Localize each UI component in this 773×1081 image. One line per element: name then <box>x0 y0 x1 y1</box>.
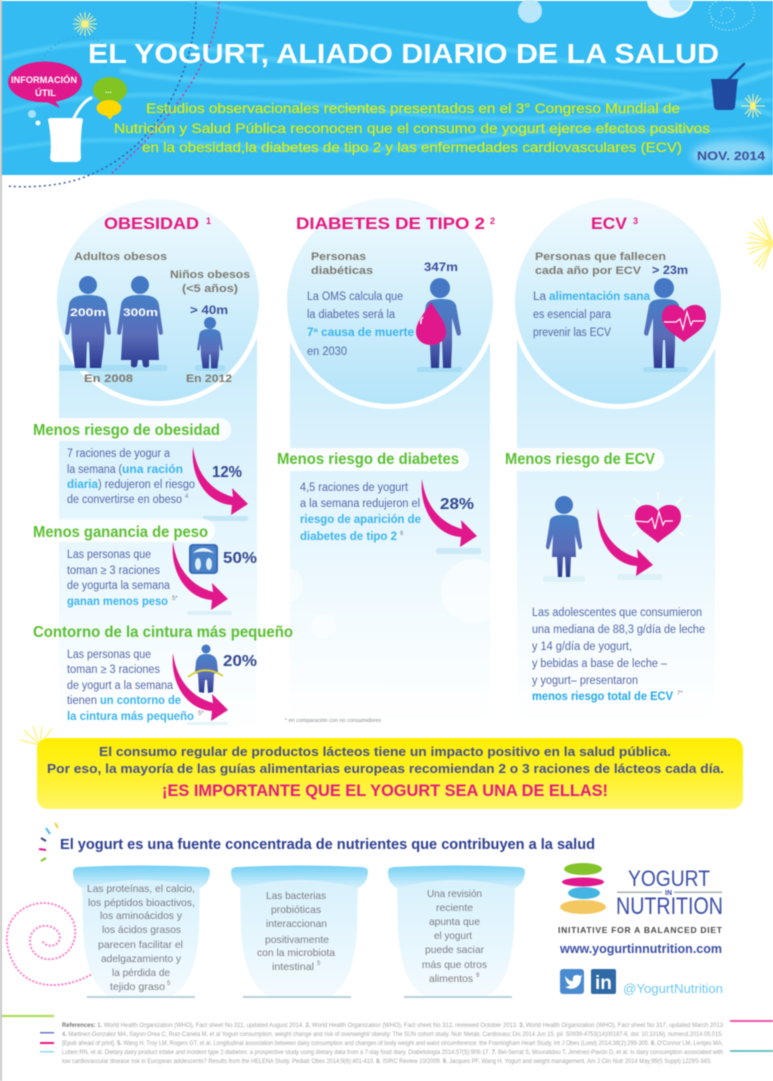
text block <box>67 549 178 608</box>
text: alimentación sana: alimentación sana <box>549 291 651 303</box>
arrow <box>598 508 653 576</box>
subtitle: Estudios observacionales recientes presentados en el 3° Congreso Mundial de <box>146 100 680 116</box>
text: el yogurt <box>434 930 472 942</box>
panel: obesidad <box>52 194 264 730</box>
subtitle <box>114 100 710 155</box>
text block: menos riesgo total de ECV <box>532 691 673 703</box>
stat: 12% <box>212 464 242 481</box>
references: Luben RN, et al. Dietary dairy product intake and incident type 2 diabetes: a prospective study using dietary data from a 7-day food diary. Diabetologia 2014;57(5):909-17. 7. Bel-Serrat S, Mouratidou T, Jiménez-Pavón D, et al. Is dairy consumption associated with <box>62 1049 723 1056</box>
heading: Menos ganancia de peso <box>33 524 208 541</box>
text: OMS: La OMS calcula que <box>307 291 403 303</box>
text block: un contorno de <box>100 695 181 707</box>
text block: 5* <box>198 711 204 717</box>
yellow banner: ¡ES IMPORTANTE QUE EL YOGURT SEA UNA DE ELLAS! <box>162 781 608 800</box>
text <box>87 883 195 993</box>
date bubble: NOV. 2014 <box>697 149 765 163</box>
text block: 5* <box>172 596 178 602</box>
heading: ecv: ECV <box>591 214 628 233</box>
label: adultos obesos: Adultos obesos <box>74 251 167 263</box>
text: 5 <box>317 961 321 967</box>
wordmark: IN <box>665 890 672 897</box>
heading: Contorno de la cintura más pequeño <box>33 624 293 641</box>
text block: diaria <box>67 479 99 491</box>
section: menos riesgo de ecv <box>498 448 705 703</box>
text: OMS: en 2030 <box>307 346 347 358</box>
text: OMS: 7ª causa de muerte <box>307 327 414 339</box>
references <box>62 1022 723 1065</box>
label: 40m: > 40m <box>190 303 228 317</box>
text: más que otros <box>422 959 487 971</box>
text: 9 <box>476 973 480 979</box>
shadows <box>543 574 662 582</box>
callout: información útil <box>8 62 82 108</box>
text: apunta que <box>429 916 480 928</box>
icon: person with heart <box>643 278 706 372</box>
icon: linkedin <box>591 969 616 994</box>
icon: stacked stones <box>560 863 606 914</box>
logo: yogurt in nutrition <box>558 863 723 996</box>
decorative ticks <box>39 823 58 861</box>
text: Una revisión <box>427 888 482 900</box>
page left edge <box>0 0 2 1081</box>
icon: adolescent <box>546 496 582 577</box>
heading: diabetes: 2 <box>490 216 495 226</box>
text block <box>67 448 195 506</box>
spiral <box>7 903 105 985</box>
icon: adult 300m <box>117 276 163 368</box>
pill <box>498 448 664 471</box>
text block: 6 <box>400 531 404 537</box>
text: con la microbiota <box>257 947 335 959</box>
text: alimentación sana: prevenir las ECV <box>533 327 611 339</box>
label: personas que fallecen: Personas que fallecen <box>535 251 666 263</box>
text: parecen facilitar el <box>98 939 183 951</box>
text block: tienen <box>67 695 97 707</box>
heading: Menos riesgo de obesidad <box>33 422 220 439</box>
text block: la semana ( <box>67 464 122 476</box>
star right <box>741 94 765 118</box>
shadow <box>187 611 232 615</box>
url: www.yogurtinnutrition.com <box>559 941 722 956</box>
text block: 4,5 raciones de yogurt <box>300 482 409 494</box>
label: 23m: > 23m <box>652 263 688 277</box>
text block: 4 <box>185 494 189 500</box>
icon: linkedin: in <box>595 973 612 994</box>
stat: 28% <box>440 496 474 513</box>
text block: riesgo de aparición de <box>300 514 421 526</box>
text: los ácidos grasos <box>102 924 181 936</box>
text block: una ración <box>122 464 183 476</box>
section: menos riesgo de obesidad <box>26 418 248 521</box>
arrow <box>173 542 228 610</box>
text: los péptidos bioactivos, <box>88 897 195 909</box>
yellow banner: Por eso, la mayoría de las guías alimentarias europeas recomiendan 2 o 3 raciones de lácteos cada día. <box>47 761 724 776</box>
text: OMS: la diabetes será la <box>307 309 396 321</box>
text <box>257 890 335 973</box>
dotted swirl <box>709 0 754 30</box>
text: la pérdida de <box>112 967 170 979</box>
heading: obesidad: 1 <box>206 216 211 226</box>
text <box>422 888 487 985</box>
text: reciente <box>436 902 473 914</box>
shadow <box>187 722 228 725</box>
wordmark <box>616 866 723 920</box>
pill <box>26 519 215 542</box>
label: niños obesos: Niños obesos <box>170 269 250 281</box>
label: personas que fallecen <box>535 251 666 277</box>
label: niños obesos <box>170 269 250 295</box>
heading: Menos riesgo de ECV <box>505 451 655 468</box>
icon: man with tape <box>188 644 223 693</box>
pill <box>26 418 231 441</box>
panel: ecv <box>510 193 726 720</box>
text block: la cintura más pequeño <box>67 711 194 723</box>
yellow banner <box>37 738 743 809</box>
text block: Las personas que <box>67 549 151 561</box>
decorative circles <box>267 559 505 638</box>
references: low cardiovascular disease risk in European adolescents? Results from the HELENA Study. Pediatr Obes 2014;9(6):401-410. 8. ISIRC Review 10/2009. 9. Jacques PF, Wang H. Yogurt and weight management. Am J Clin Nutr 2014 May;99(5 Suppl):1229S-34S. <box>62 1058 712 1065</box>
label: personas que fallecen: cada año por ECV <box>535 265 642 277</box>
heading: diabetes: DIABETES DE TIPO 2 <box>296 214 485 233</box>
text: alimentos <box>429 973 473 985</box>
pill <box>270 448 469 471</box>
text: alimentación sana <box>533 291 651 339</box>
handle: @YogurtNutrition <box>623 981 723 996</box>
icon: child <box>197 317 223 368</box>
icon: person with drop <box>416 278 462 372</box>
cup 2 <box>231 866 368 998</box>
icon: speech bubbles <box>93 77 127 120</box>
header banner <box>2 0 773 187</box>
text block <box>532 607 705 703</box>
text block: toman ≥ 3 raciones <box>67 664 160 676</box>
text: intestinal <box>272 961 314 973</box>
star <box>73 12 97 36</box>
text: tejido graso <box>110 981 165 993</box>
heading: Menos riesgo de diabetes <box>277 451 459 468</box>
text: OMS <box>307 291 414 358</box>
decorative star right <box>747 217 773 269</box>
label: personas diabéticas: diabéticas <box>311 265 373 277</box>
text: alimentación sana: es esencial para <box>533 309 612 321</box>
text block: 7* <box>677 691 683 697</box>
text block: y 14 g/día de yogurt, <box>532 641 632 653</box>
shadows <box>59 365 225 371</box>
text: adelgazamiento y <box>101 953 182 965</box>
text block: de yogurt a la semana <box>67 680 174 692</box>
text block: de convertirse en obeso <box>67 494 182 506</box>
wordmark: YOGURT <box>628 866 710 891</box>
text block: ganan menos peso <box>67 596 168 608</box>
text: interaccionan <box>266 918 327 930</box>
text: los aminoácidos y <box>100 910 183 922</box>
label: personas diabéticas: Personas <box>311 251 366 263</box>
label: en 2012: En 2012 <box>186 373 232 385</box>
arrow <box>193 447 248 515</box>
text block: diabetes de tipo 2 <box>300 531 397 543</box>
icon: white yogurt cup <box>28 98 91 162</box>
references: References: 1. World Health Organization (WHO), Fact sheet No 311, updated August 2014. 2. World Health Organization (WHO), Fact sheet No 312, reviewed October 2013. 3. World Health Organization (WHO), Fact sheet No 317, updated March 2013 <box>62 1022 723 1029</box>
stat: 20% <box>223 653 257 670</box>
shadow <box>203 516 248 521</box>
section heading: nutrientes: El yogurt es una fuente concentrada de nutrientes que contribuyen a la salud <box>60 836 595 853</box>
references: [Epub ahead of print]. 5. Wang H, Troy LM, Rogers GT, et al. Longitudinal association between dairy consumption and changes of body weight and waist circumference: the Framingham Heart Study. Int J Obes (Lond) 2014;38(2):299-305. 6. O'Connor LM, Lentjes MA, <box>62 1040 723 1047</box>
text block: de yogurta la semana <box>67 580 171 592</box>
yellow banner: El consumo regular de productos lácteos tiene un impacto positivo en la salud pública. <box>99 744 671 759</box>
label: 347m: 347m <box>424 260 458 274</box>
decorative star left <box>20 726 52 745</box>
shadow <box>436 548 481 554</box>
icon: speech bubbles: ... <box>105 86 112 95</box>
decorative ellipses <box>518 0 693 23</box>
title: EL YOGURT, ALIADO DIARIO DE LA SALUD <box>88 38 719 69</box>
text block <box>300 482 421 543</box>
heading: obesidad: OBESIDAD <box>104 214 199 233</box>
text block: toman ≥ 3 raciones <box>67 565 160 577</box>
stat: 50% <box>223 550 257 567</box>
text block: y yogurt– presentaron <box>532 675 638 687</box>
subtitle: en la obesidad,la diabetes de tipo 2 y las enfermedades cardiovasculares (ECV) <box>142 139 682 155</box>
panel: diabetes <box>267 193 505 720</box>
decorative color bars <box>2 1015 773 1052</box>
icon: adult 200m: 200m <box>70 307 106 319</box>
icon: blue yogurt cup <box>711 64 744 110</box>
cup 1 <box>73 866 210 998</box>
icon: adult 200m <box>65 276 111 368</box>
arrow <box>173 653 228 721</box>
dotted curves <box>6 2 219 187</box>
label: personas diabéticas <box>311 251 373 277</box>
text block: una mediana de 88,3 g/día de leche <box>532 624 705 636</box>
text: puede saciar <box>425 944 484 956</box>
section: contorno de la cintura <box>33 624 293 725</box>
text block: 7 raciones de yogur a <box>67 448 171 460</box>
heading: ecv: 3 <box>633 216 638 226</box>
section: menos riesgo de diabetes <box>270 448 481 554</box>
arrow <box>422 479 477 547</box>
callout: información útil: INFORMACIÓN <box>11 74 77 85</box>
text block: y bebidas a base de leche – <box>532 658 668 670</box>
tagline: INITIATIVE FOR A BALANCED DIET <box>558 925 723 935</box>
text block: Las adolescentes que consumieron <box>532 607 702 619</box>
label: en 2008: En 2008 <box>84 373 133 385</box>
callout: información útil: ÚTIL <box>35 87 57 98</box>
text: Las proteínas, el calcio, <box>87 883 195 895</box>
subtitle: Nutrición y Salud Pública reconocen que el consumo de yogurt ejerce efectos positivos <box>114 120 710 136</box>
wordmark: NUTRITION <box>616 893 723 920</box>
text: alimentación sana: La <box>533 291 547 303</box>
text: Las bacterias <box>266 890 326 902</box>
icon: scale <box>189 544 218 574</box>
section: menos ganancia de peso <box>26 519 257 615</box>
text block: Las personas que <box>67 649 151 661</box>
footnote: * en comparación con no consumidores <box>285 718 382 724</box>
text block <box>67 649 204 723</box>
text block: ) redujeron el riesgo <box>98 479 195 491</box>
cup 3 <box>388 866 525 998</box>
icon: adult 300m: 300m <box>123 307 158 319</box>
date bubble <box>691 140 773 170</box>
text block: a la semana redujeron el <box>300 498 420 510</box>
label: niños obesos: (<5 años) <box>182 283 238 295</box>
text: positivamente <box>265 934 329 946</box>
text: probióticas <box>271 904 321 916</box>
text: 5 <box>167 981 171 987</box>
icon: twitter <box>560 969 584 994</box>
icon: heart <box>624 492 692 543</box>
